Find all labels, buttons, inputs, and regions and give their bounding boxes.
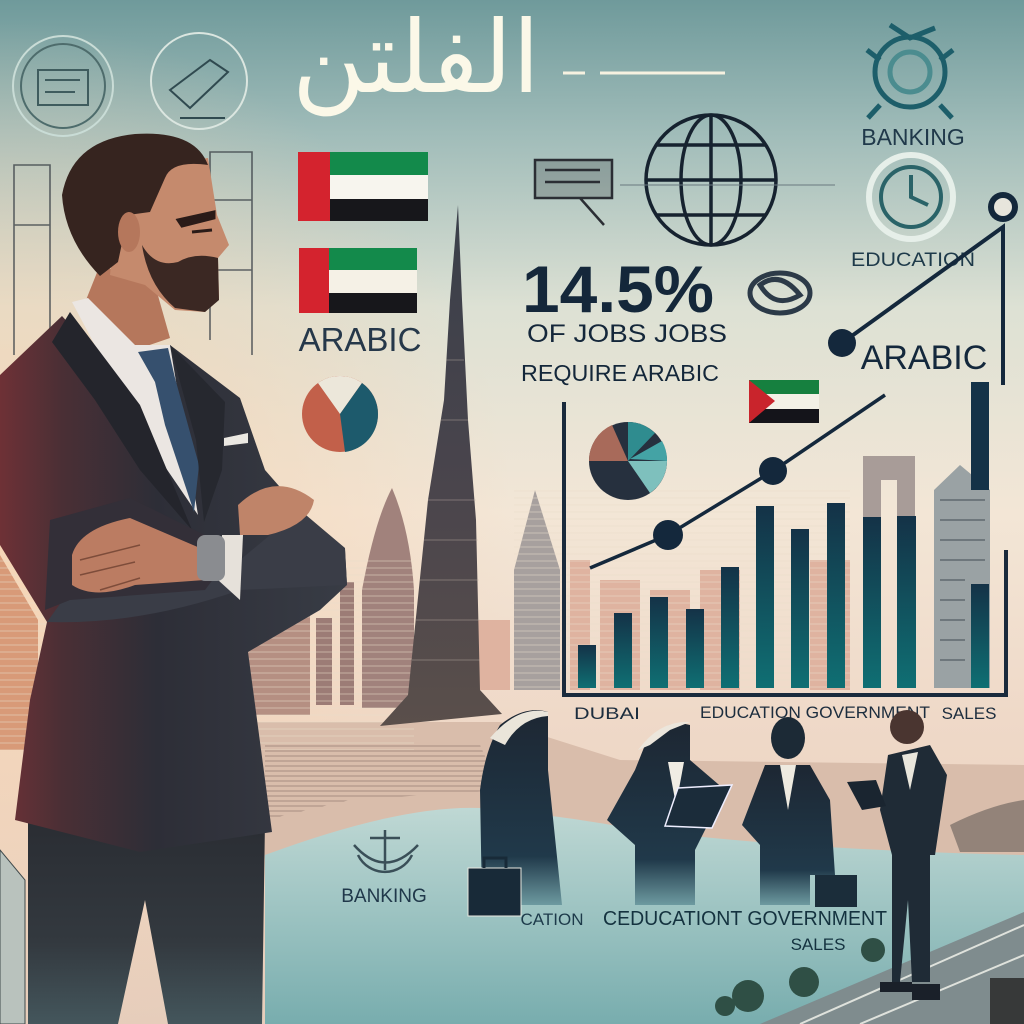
icon: clock: [869, 155, 953, 239]
watch: [197, 535, 225, 581]
pie chart right: [589, 422, 667, 500]
face: [110, 158, 229, 312]
chart axis labels: EDUCATION GOVERNMENT: [700, 703, 930, 722]
cuff: [218, 535, 243, 600]
foreground building bottom left: [0, 850, 25, 1024]
label: arabic left: ARABIC: [299, 321, 421, 358]
figure: man in ghutra: [480, 710, 562, 905]
tower lines: [412, 360, 480, 660]
ground: [255, 722, 1024, 860]
jacket: [0, 316, 347, 852]
under forearm: [47, 510, 347, 622]
flag: second UAE: [299, 248, 417, 313]
figure: businessman: [742, 717, 857, 907]
forearm fold: [45, 498, 235, 610]
pocket square: [224, 433, 248, 446]
chart axis labels: DUBAI: [574, 704, 640, 723]
icon: globe: [646, 115, 776, 245]
icon: emblem: [750, 273, 810, 313]
hand right: [238, 486, 314, 535]
chart axis labels: [574, 703, 996, 723]
main figure: man in suit: [0, 134, 347, 1024]
shirt: [72, 298, 198, 515]
label: sales: SALES: [791, 935, 845, 954]
upper trend line: [828, 192, 1018, 385]
skyline: [0, 488, 850, 750]
icon: round seal right: [151, 33, 247, 129]
lower trend line: [590, 395, 885, 568]
brow and eye: [178, 212, 214, 232]
burj tower: [380, 205, 502, 726]
chart axis labels: SALES: [942, 704, 996, 723]
label: education fragment: CATION: [521, 910, 583, 929]
trousers: [28, 820, 265, 1024]
flag: top UAE: [298, 152, 428, 221]
pie chart left: [302, 376, 378, 452]
water: [265, 808, 1024, 1024]
beard: [142, 245, 219, 312]
label: arabic right: ARABIC: [861, 339, 987, 377]
far shore detail: [950, 800, 1024, 852]
finger lines: [80, 545, 140, 590]
statistic: 14.5%: [522, 252, 714, 326]
neck: [84, 265, 170, 350]
title: الفلتن: [292, 2, 540, 117]
statistic: OF JOBS JOBS: [527, 320, 727, 348]
label: banking top: BANKING: [861, 124, 965, 150]
hand left: [72, 518, 205, 592]
icon: round seal left: [13, 36, 113, 136]
label: banking bottom: BANKING: [341, 886, 427, 907]
figure: man with tablet: [847, 710, 947, 1000]
ground detail: [265, 745, 500, 820]
right lapel: [170, 345, 225, 522]
icon: banking emblem: [354, 830, 418, 872]
trees: [715, 938, 885, 1016]
hair: [62, 134, 208, 276]
faint grid frame: [14, 152, 252, 355]
icon: gear: [867, 25, 953, 118]
statistic: REQUIRE ARABIC: [521, 360, 719, 386]
road bottom right: [760, 912, 1024, 1024]
icon: briefcase: [468, 858, 521, 916]
statistic: [521, 252, 727, 386]
flag: palestine-style: [749, 380, 819, 423]
ear: [118, 212, 140, 252]
bench: [990, 978, 1024, 1024]
label: education top: EDUCATION: [851, 250, 975, 271]
figure: man with papers: [607, 722, 732, 905]
left lapel: [52, 312, 192, 530]
icon: stamp: [535, 160, 612, 225]
tie: [138, 348, 199, 512]
label: education government: CEDUCATIONT GOVERNMENT: [603, 908, 887, 930]
bar chart: [564, 382, 1006, 695]
